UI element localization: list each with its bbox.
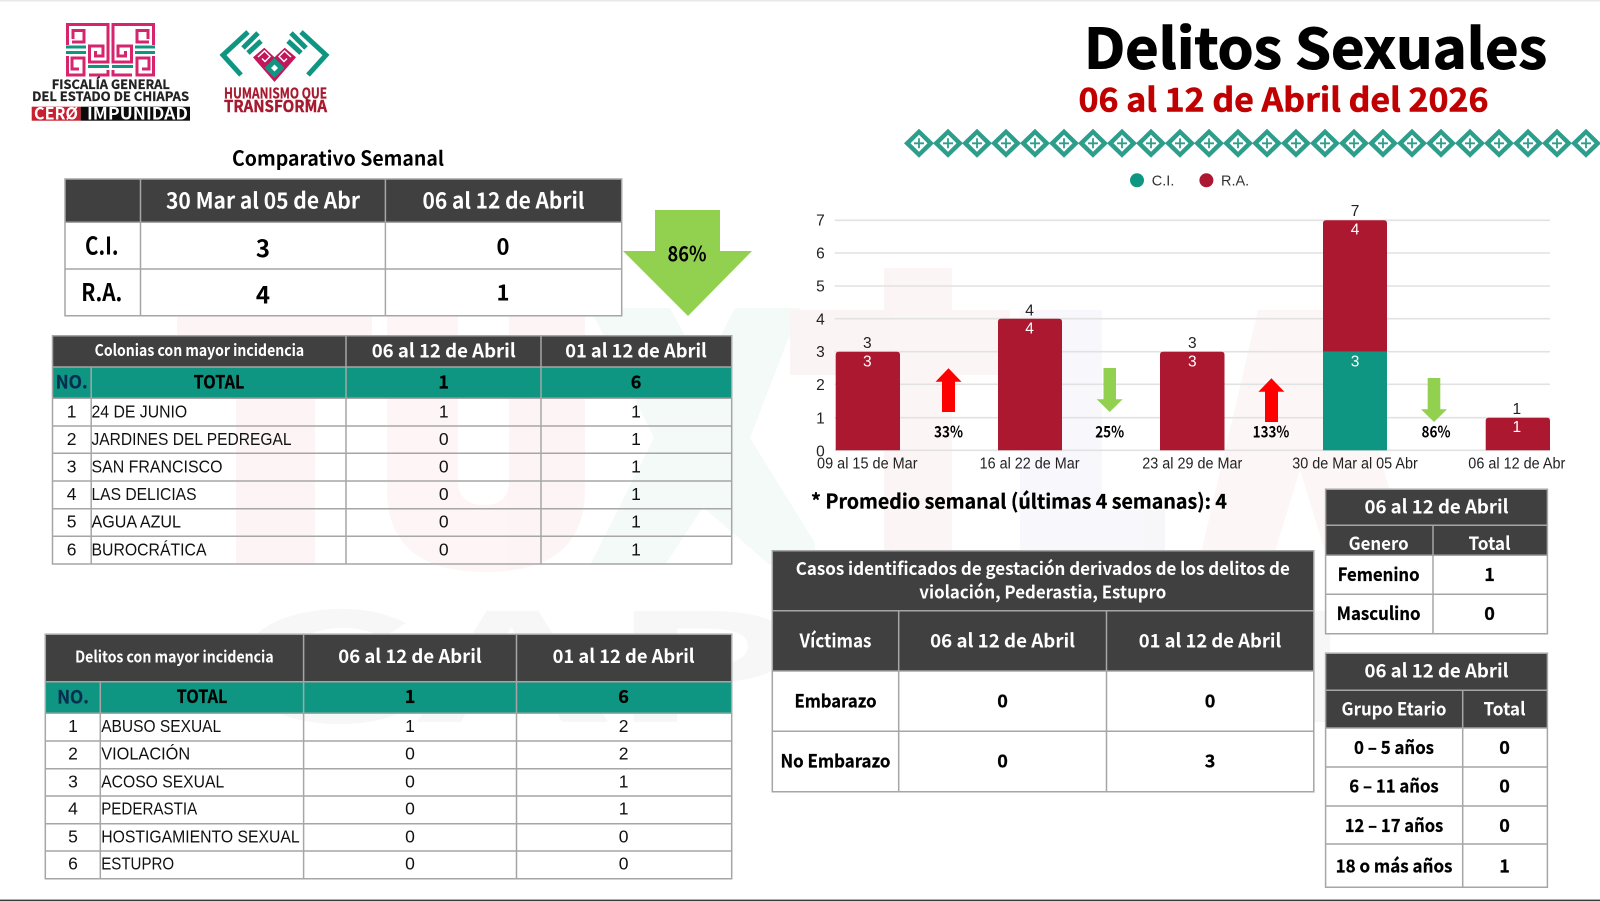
- table: género: 06 al 12 de Abril: [1364, 492, 1509, 520]
- table: colonias con mayor incidencia: 0: [439, 512, 449, 532]
- table: delitos con mayor incidencia: 0: [405, 799, 415, 819]
- table: comparativo semanal: 1: [497, 276, 509, 308]
- y axis labels: 3: [816, 344, 825, 361]
- table: colonias con mayor incidencia: 4: [67, 484, 77, 504]
- table: casos de gestación: Víctimas: [799, 626, 872, 654]
- logo band: Cero Impunidad: IMPUNIDAD: [87, 100, 188, 124]
- bar: 30 de Mar al 05 Abr: 7: [1351, 203, 1359, 220]
- arrow: down 86%: [1421, 378, 1450, 442]
- watermark: TUXTLA CAPITAL: [177, 268, 1430, 766]
- arrow: up 33%: 33%: [934, 418, 963, 442]
- y axis labels: 0: [816, 444, 825, 461]
- table: delitos con mayor incidencia: [45, 634, 732, 879]
- table: casos de gestación: 0: [997, 748, 1008, 774]
- table: delitos con mayor incidencia: 0: [619, 854, 629, 874]
- bar: 16 al 22 de Mar: 4: [1025, 320, 1034, 337]
- table: delitos con mayor incidencia: Delitos con mayor incidencia: [75, 644, 274, 668]
- logo: Fiscalía General del Estado de Chiapas: [32, 24, 190, 124]
- table: colonias con mayor incidencia: 1: [631, 539, 641, 559]
- table: colonias con mayor incidencia: 1: [67, 402, 76, 422]
- table: grupo etario: 1: [1499, 852, 1510, 878]
- table: género: Masculino: [1337, 600, 1421, 626]
- icon: meander emblem: [66, 24, 155, 75]
- bar: 23 al 29 de Mar: [1160, 335, 1224, 450]
- x axis labels: 23 al 29 de Mar: [1142, 455, 1242, 472]
- table: género: 0: [1484, 600, 1495, 626]
- table: casos de gestación: 06 al 12 de Abril: [930, 626, 1075, 654]
- table: delitos con mayor incidencia: 2: [68, 744, 78, 764]
- table: colonias con mayor incidencia: NO.: [56, 369, 88, 395]
- logo text: Fiscalía General: FISCALÍA GENERAL: [52, 74, 170, 93]
- table: colonias con mayor incidencia: 01 al 12 de Abril: [565, 336, 707, 364]
- logo text: Humanismo que: HUMANISMO QUE: [224, 82, 327, 103]
- bar: 23 al 29 de Mar: 3: [1188, 335, 1197, 352]
- bar: 06 al 12 de Abr: 1: [1512, 419, 1521, 436]
- table: delitos con mayor incidencia: 1: [405, 683, 415, 709]
- logo band: Cero Impunidad: [32, 100, 190, 124]
- logo: Humanismo que Transforma: [223, 32, 328, 117]
- table: colonias con mayor incidencia: 0: [439, 484, 449, 504]
- y axis labels: [816, 212, 825, 461]
- table: delitos con mayor incidencia: ABUSO SEXUAL: [101, 716, 221, 736]
- table: colonias con mayor incidencia: 1: [631, 456, 641, 476]
- bar: 30 de Mar al 05 Abr: 3: [1351, 354, 1359, 371]
- logo text: Transforma: TRANSFORMA: [224, 93, 328, 117]
- bar: 06 al 12 de Abr: [1486, 401, 1550, 450]
- table: casos de gestación: 0: [997, 687, 1008, 713]
- table: colonias con mayor incidencia: 24 DE JUNIO: [92, 402, 187, 422]
- table: colonias con mayor incidencia: 6: [67, 539, 76, 559]
- y axis labels: 4: [816, 311, 825, 328]
- table: grupo etario: 0 – 5 años: [1354, 734, 1434, 760]
- table: delitos con mayor incidencia: 6: [68, 854, 78, 874]
- y axis labels: 6: [816, 246, 825, 262]
- table: colonias con mayor incidencia: BUROCRÁTICA: [92, 539, 207, 559]
- decorative diamond band: [904, 129, 1600, 158]
- table: casos de gestación: [772, 551, 1314, 792]
- subtitle: date range: 06 al 12 de Abril del 2026: [1078, 74, 1488, 122]
- table: delitos con mayor incidencia: NO.: [57, 683, 89, 709]
- table: grupo etario: 6 – 11 años: [1349, 773, 1439, 799]
- table: colonias con mayor incidencia: TOTAL: [194, 369, 244, 395]
- table: grupo etario: 0: [1499, 773, 1510, 799]
- table: comparativo semanal: 0: [497, 230, 509, 262]
- bar: 30 de Mar al 05 Abr: [1323, 203, 1387, 450]
- table: colonias con mayor incidencia: 1: [631, 484, 641, 504]
- table: comparativo semanal: [65, 179, 622, 316]
- table: casos de gestación: 3: [1205, 748, 1215, 774]
- table: colonias con mayor incidencia: 0: [439, 456, 449, 476]
- table: comparativo semanal: 4: [256, 276, 270, 310]
- table: colonias con mayor incidencia: LAS DELICIAS: [92, 484, 196, 504]
- x axis labels: 09 al 15 de Mar: [817, 455, 918, 472]
- table: género: 1: [1484, 561, 1495, 587]
- table: grupo etario: Total: [1484, 696, 1526, 722]
- table: colonias con mayor incidencia: 1: [631, 402, 641, 422]
- logo text: del Estado de Chiapas: DEL ESTADO DE CHIAPAS: [32, 86, 189, 105]
- arrow: up 133%: [1253, 378, 1289, 442]
- arrow: 86% decrease: [623, 210, 752, 316]
- table: grupo etario: Grupo Etario: [1342, 696, 1446, 722]
- table: colonias con mayor incidencia: 5: [67, 512, 76, 532]
- table: delitos con mayor incidencia: PEDERASTIA: [101, 799, 197, 819]
- table: delitos con mayor incidencia: 4: [68, 799, 78, 819]
- x axis labels: 06 al 12 de Abr: [1468, 455, 1565, 472]
- bar: 09 al 15 de Mar: 3: [863, 335, 872, 352]
- table: colonias con mayor incidencia: 0: [439, 429, 449, 449]
- table: colonias con mayor incidencia: 1: [438, 369, 449, 395]
- bar: 09 al 15 de Mar: 3: [863, 354, 872, 371]
- arrow: 86% decrease: 86%: [668, 238, 706, 267]
- table: colonias con mayor incidencia: 1: [439, 402, 449, 422]
- table: grupo etario: 06 al 12 de Abril: [1364, 656, 1509, 684]
- table: grupo etario: 0: [1499, 734, 1510, 760]
- table: colonias con mayor incidencia: SAN FRANCISCO: [92, 456, 222, 476]
- note: promedio semanal: * Promedio semanal (últimas 4 semanas): 4: [811, 485, 1227, 514]
- table: delitos con mayor incidencia: ESTUPRO: [101, 854, 174, 874]
- bar: 23 al 29 de Mar: 3: [1188, 354, 1197, 371]
- table: casos de gestación: 0: [1205, 687, 1215, 713]
- table: colonias con mayor incidencia: 3: [67, 456, 76, 476]
- arrow: down 25%: 25%: [1095, 418, 1124, 442]
- arrow: up 133%: 133%: [1253, 418, 1289, 442]
- table: casos de gestación: Embarazo: [794, 687, 876, 713]
- arrow: down 25%: [1095, 368, 1124, 442]
- title: Delitos Sexuales: [1084, 4, 1547, 84]
- logo band: Cero Impunidad: CERØ: [34, 100, 78, 124]
- table: delitos con mayor incidencia: HOSTIGAMIENTO SEXUAL: [101, 826, 300, 846]
- watermark: TUXTLA CAPITAL: CAPITAL: [225, 549, 1430, 766]
- table: grupo etario: [1326, 653, 1547, 887]
- table: colonias con mayor incidencia: JARDINES DEL PEDREGAL: [92, 429, 292, 449]
- y axis labels: 2: [816, 377, 825, 394]
- arrow: up 33%: [934, 368, 963, 442]
- table: colonias con mayor incidencia: 0: [439, 539, 449, 559]
- bar: 09 al 15 de Mar: [836, 335, 900, 450]
- table: comparativo semanal: 30 Mar al 05 de Abr: [166, 184, 360, 216]
- table: colonias con mayor incidencia: 1: [631, 512, 641, 532]
- chart legend: R.A.: [1221, 173, 1249, 189]
- table: colonias con mayor incidencia: 1: [631, 429, 641, 449]
- x axis labels: 30 de Mar al 05 Abr: [1292, 455, 1418, 472]
- table: comparativo semanal: C.I.: [85, 226, 119, 262]
- table: colonias con mayor incidencia: 06 al 12 de Abril: [372, 336, 516, 364]
- table: colonias con mayor incidencia: AGUA AZUL: [92, 512, 181, 532]
- table: comparativo semanal: 06 al 12 de Abril: [422, 184, 585, 216]
- table: delitos con mayor incidencia: 3: [68, 771, 78, 791]
- y axis labels: 1: [816, 410, 825, 427]
- stacked bar chart: [816, 203, 1565, 472]
- table: género: Genero: [1349, 530, 1409, 556]
- table: delitos con mayor incidencia: 1: [405, 716, 415, 736]
- table: delitos con mayor incidencia: 0: [619, 826, 629, 846]
- table: delitos con mayor incidencia: 5: [68, 826, 78, 846]
- table: casos de gestación: violación, Pederastia, Estupro: [919, 579, 1166, 604]
- table: grupo etario: 0: [1499, 812, 1510, 838]
- table: delitos con mayor incidencia: 06 al 12 de Abril: [338, 642, 482, 669]
- bar: 16 al 22 de Mar: [998, 302, 1062, 450]
- table: colonias con mayor incidencia: 6: [631, 369, 641, 395]
- table: delitos con mayor incidencia: TOTAL: [177, 683, 227, 709]
- table: delitos con mayor incidencia: 0: [405, 771, 415, 791]
- table: casos de gestación: No Embarazo: [780, 748, 890, 774]
- table: comparativo semanal: R.A.: [81, 273, 122, 308]
- table: delitos con mayor incidencia: 1: [619, 799, 628, 819]
- table: delitos con mayor incidencia: 0: [405, 744, 415, 764]
- arrow: down 86%: 86%: [1422, 418, 1450, 442]
- table: delitos con mayor incidencia: 01 al 12 de Abril: [553, 642, 695, 669]
- table: colonias con mayor incidencia: [52, 336, 732, 564]
- chart legend: C.I.: [1152, 173, 1174, 189]
- table: delitos con mayor incidencia: 2: [619, 744, 628, 764]
- chart legend: [1130, 173, 1249, 189]
- table: delitos con mayor incidencia: 1: [619, 771, 628, 791]
- y axis labels: 5: [816, 279, 825, 296]
- table: delitos con mayor incidencia: 2: [619, 716, 628, 736]
- bar: 30 de Mar al 05 Abr: 4: [1351, 222, 1360, 239]
- table: género: Femenino: [1338, 561, 1420, 587]
- table: comparativo semanal: 3: [256, 229, 270, 264]
- table: casos de gestación: 01 al 12 de Abril: [1139, 626, 1281, 654]
- x axis labels: 16 al 22 de Mar: [980, 455, 1080, 472]
- table: colonias con mayor incidencia: Colonias con mayor incidencia: [95, 337, 304, 361]
- table: delitos con mayor incidencia: 6: [618, 683, 629, 709]
- y axis labels: 7: [816, 212, 825, 230]
- table: género: Total: [1468, 530, 1511, 556]
- table: delitos con mayor incidencia: 0: [405, 826, 415, 846]
- bar: 06 al 12 de Abr: 1: [1512, 401, 1521, 418]
- table: casos de gestación: Casos identificados de gestación derivados de los delitos de: [796, 556, 1290, 581]
- table: grupo etario: 18 o más años: [1336, 852, 1452, 878]
- table: grupo etario: 12 – 17 años: [1345, 812, 1443, 838]
- table: delitos con mayor incidencia: VIOLACIÓN: [101, 743, 190, 764]
- heading: Comparativo Semanal: Comparativo Semanal: [232, 142, 444, 171]
- table: delitos con mayor incidencia: 0: [405, 854, 415, 874]
- table: delitos con mayor incidencia: ACOSO SEXUAL: [101, 771, 224, 791]
- icon: teal chevrons and heart: [223, 32, 326, 82]
- table: delitos con mayor incidencia: 1: [68, 716, 78, 736]
- bar: 16 al 22 de Mar: 4: [1025, 302, 1034, 319]
- x axis labels: [817, 455, 1565, 472]
- table: colonias con mayor incidencia: 2: [67, 429, 76, 449]
- table: género: [1326, 489, 1547, 634]
